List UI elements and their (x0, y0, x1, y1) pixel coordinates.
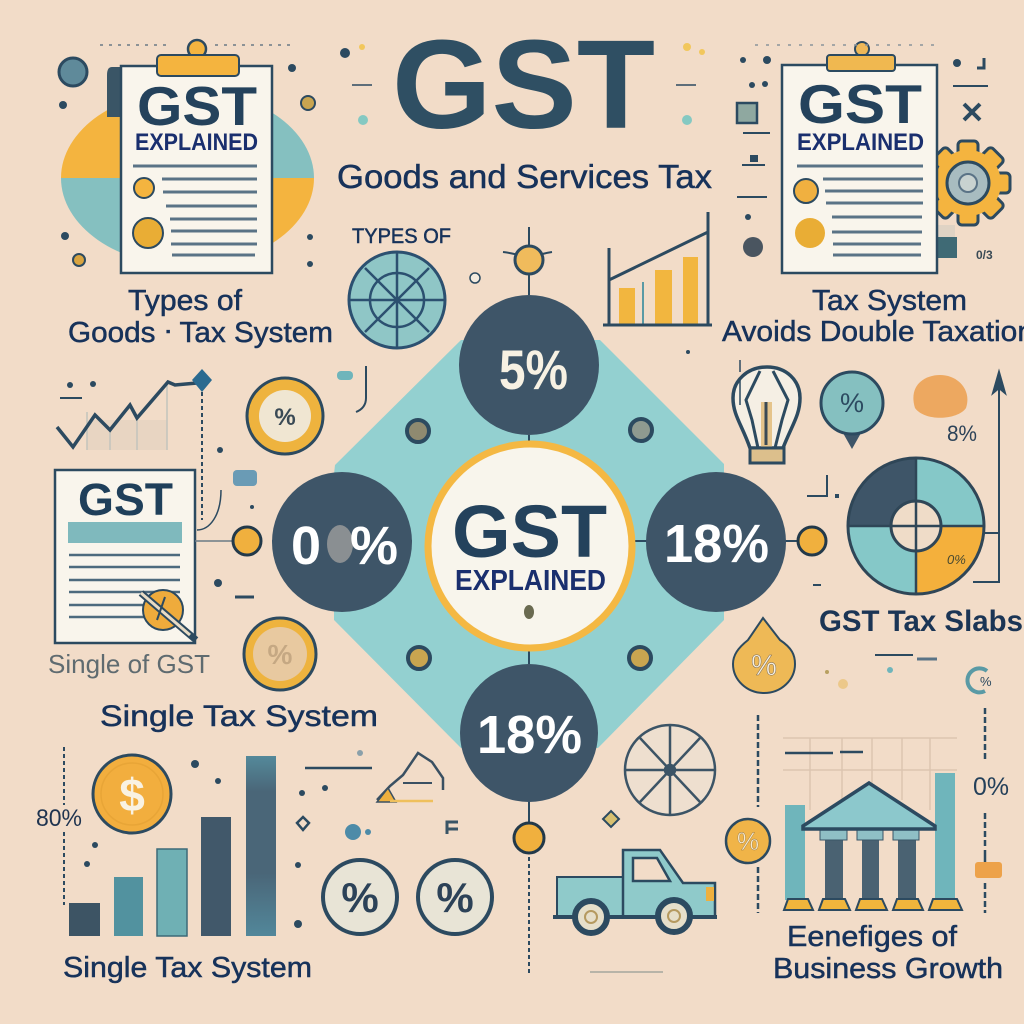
chart: line chart left (57, 369, 221, 530)
icon: pickup truck (553, 850, 717, 933)
centre badge (428, 444, 632, 648)
icon: orange blob (913, 375, 967, 418)
label: 8%: 8% (947, 421, 977, 446)
icon: right slider (975, 708, 1002, 913)
icon: light bulb (733, 367, 800, 463)
node: 0% (272, 472, 412, 612)
document: GST (798, 73, 922, 135)
connector bottom dot (514, 823, 544, 973)
icon: small teal percent: % (980, 674, 992, 689)
label: types of: TYPES OF (352, 225, 451, 248)
node: 5%: 5% (499, 338, 568, 401)
panel: left GST document: GST (78, 474, 173, 525)
document: GST (137, 75, 257, 137)
text: tax system avoids double taxation (722, 285, 1024, 348)
centre badge: EXPLAINED (455, 565, 606, 597)
connector nodes (407, 419, 652, 669)
icon: ship wheel (625, 725, 715, 815)
document (782, 42, 937, 273)
arrow (973, 372, 1005, 582)
chart: pie chart (848, 458, 984, 594)
label: 80%: 80% (36, 805, 82, 832)
text: types of goods tax system (68, 285, 333, 349)
text: benefits of business growth (773, 921, 1003, 985)
chart: bottom-left bars (36, 747, 276, 936)
icon: small teal percent (967, 668, 992, 692)
panel: top-left document (61, 40, 314, 273)
central diamond (272, 295, 797, 825)
text: benefits of business growth: Business Growth (773, 953, 1003, 985)
icon: small gold hill (305, 753, 443, 802)
icon: bank (784, 783, 962, 910)
chart: pie chart: 0% (947, 552, 966, 567)
text: benefits of business growth: Eenefiges of (787, 921, 958, 953)
panel: right top icons (733, 367, 1005, 582)
decorative specks: 0/3 (976, 248, 993, 262)
text: single tax system bottom: Single Tax System (63, 952, 312, 984)
icon: percent coin: % (268, 639, 293, 670)
icon: dollar coin: $ (119, 769, 145, 821)
node: 18% bottom: 18% (477, 705, 582, 765)
node: 0%: % (350, 516, 398, 576)
subtitle: Goods and Services Tax (337, 158, 713, 195)
chart: bank with bars (783, 738, 962, 910)
node: 5% (459, 295, 599, 435)
icon: top-left small badge (59, 58, 87, 86)
icon: gold coin (247, 378, 323, 454)
text: single tax system middle: Single Tax System (100, 700, 378, 733)
text: types of goods tax system: Goods ᐧ Tax System (68, 317, 333, 349)
icon: percent circle two (418, 860, 492, 934)
icon: percent drop (733, 618, 795, 693)
title: GST (392, 14, 655, 155)
chart: top bar chart (603, 212, 712, 325)
node: 0%: 0 (291, 516, 321, 576)
icon: percent pin (821, 372, 883, 449)
document (121, 40, 272, 273)
icon: small percent coin: % (737, 828, 759, 856)
icon: small percent coin (726, 715, 770, 913)
icon: web wheel (349, 252, 445, 348)
icon: percent drop: % (751, 650, 777, 682)
icon: gear (926, 141, 1010, 258)
panel: left GST document (55, 470, 196, 643)
icon: gold coin: % (274, 404, 296, 431)
text: types of goods tax system: Types of (128, 285, 243, 317)
connector dot (195, 527, 261, 555)
icon: percent circle two: % (436, 874, 474, 921)
icon: pen (141, 590, 196, 640)
text: tax system avoids double taxation: Avoids Double Taxation (722, 316, 1024, 348)
document: EXPLAINED (135, 129, 258, 156)
node: 18% right: 18% (664, 514, 769, 574)
icon: percent coin (244, 618, 316, 690)
node: 18% bottom (460, 664, 598, 802)
text: tax system avoids double taxation: Tax System (812, 285, 967, 317)
icon: percent circle one (323, 860, 397, 934)
connector right dot (798, 527, 826, 555)
label: 0% right: 0% (973, 773, 1009, 801)
text: single of GST: Single of GST (48, 649, 210, 679)
icon: percent circle one: % (341, 874, 379, 921)
icon: background split circle (61, 67, 314, 266)
icon: percent pin: % (840, 388, 864, 418)
text: GST tax slabs: GST Tax Slabs (819, 605, 1023, 638)
panel: top-right document (782, 42, 1010, 273)
icon: compass marker (503, 227, 552, 295)
centre badge: GST (452, 490, 607, 573)
document: EXPLAINED (797, 129, 924, 156)
icon: dollar coin (93, 755, 171, 833)
node: 18% right (646, 472, 786, 612)
